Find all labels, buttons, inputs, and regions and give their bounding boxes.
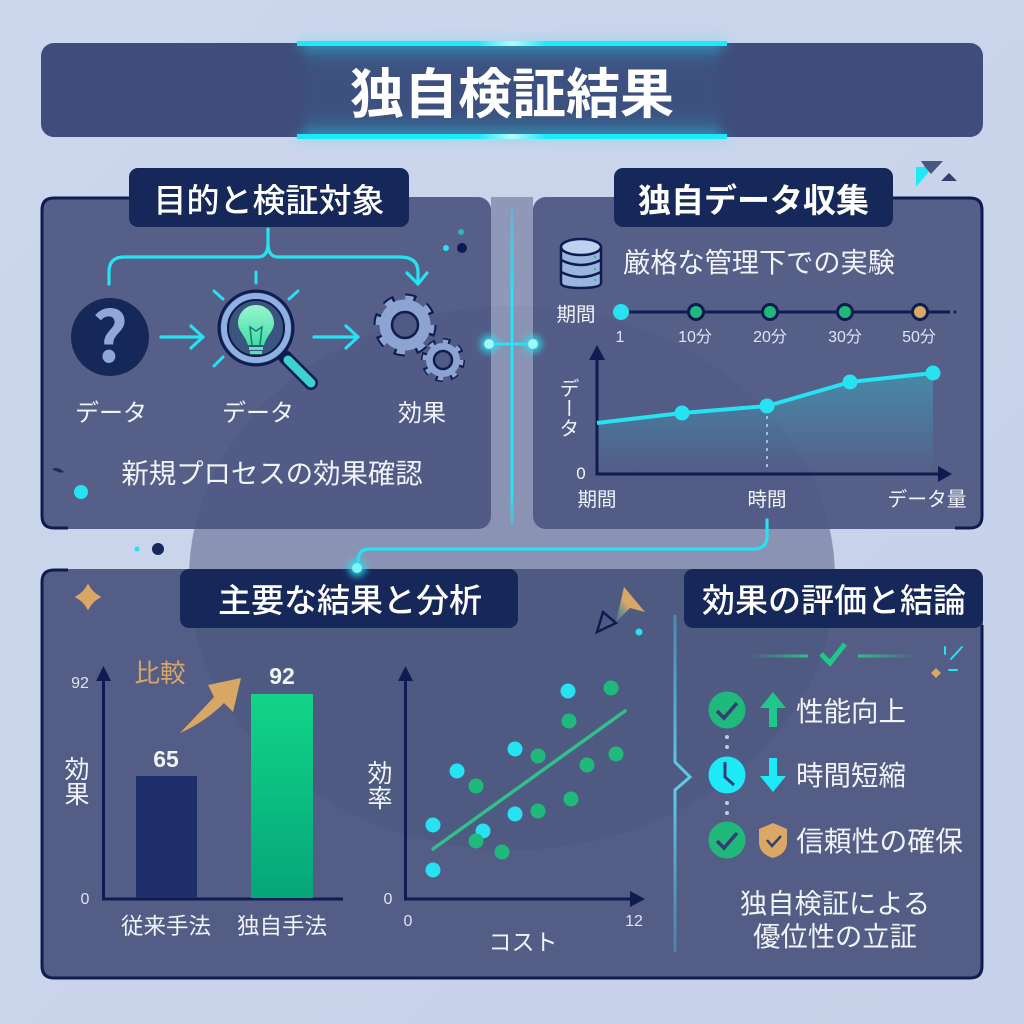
connector dots 2 bbox=[725, 801, 729, 815]
icon: magnifier with bulb bbox=[214, 272, 311, 383]
bracket connector bbox=[109, 229, 427, 284]
label: data 2: データ bbox=[222, 400, 294, 427]
title banner bbox=[41, 38, 983, 142]
arrow 1 bbox=[161, 326, 203, 348]
scatter plot bbox=[364, 666, 645, 955]
subheading: strict conditions: 厳格な管理下での実験 bbox=[623, 247, 895, 278]
line chart: データ bbox=[556, 378, 578, 438]
conclusion text: 優位性の立証 bbox=[753, 921, 917, 952]
scatter plot: 効率 bbox=[364, 760, 392, 810]
timeline bbox=[556, 304, 956, 346]
item: performance bbox=[708, 692, 906, 728]
line chart: データ量 bbox=[887, 489, 967, 511]
scatter plot: 12 bbox=[625, 913, 643, 930]
decoration: paper plane bbox=[597, 587, 645, 636]
connector: to results panel bbox=[349, 520, 767, 576]
heading: data collection bbox=[614, 168, 893, 227]
line chart: 0 bbox=[576, 464, 586, 483]
decoration: gold diamond bbox=[76, 585, 100, 609]
item: performance: 性能向上 bbox=[796, 696, 906, 727]
timeline: 10分 bbox=[678, 328, 712, 346]
item: time bbox=[708, 756, 906, 794]
connector: central line and nodes bbox=[481, 208, 541, 525]
panel: purpose and target bbox=[40, 168, 491, 530]
caption: purpose: 新規プロセスの効果確認 bbox=[121, 458, 423, 489]
check ornament bbox=[750, 644, 918, 663]
decoration: comet bbox=[52, 468, 108, 516]
bar chart: 65 bbox=[153, 746, 179, 772]
bar chart: 0 bbox=[81, 891, 90, 908]
decoration: dots bbox=[443, 229, 467, 253]
decoration: top right arrows bbox=[916, 161, 957, 187]
scatter plot: コスト bbox=[488, 929, 558, 955]
icon: gears bbox=[379, 299, 461, 378]
divider with chevron bbox=[675, 615, 690, 952]
bar chart: 92 bbox=[269, 663, 295, 689]
scatter plot: 0 bbox=[384, 891, 393, 908]
line chart: 期間 bbox=[577, 489, 617, 511]
item: reliability bbox=[708, 822, 963, 858]
arrow 2 bbox=[314, 326, 358, 348]
timeline: 30分 bbox=[828, 328, 862, 346]
timeline: 20分 bbox=[753, 328, 787, 346]
heading: purpose bbox=[129, 168, 409, 227]
heading: evaluation bbox=[684, 569, 983, 628]
timeline: 期間 bbox=[556, 304, 596, 326]
decoration: sparkle bbox=[931, 647, 962, 678]
scatter plot: 0 bbox=[404, 913, 413, 930]
panel: results and evaluation bbox=[40, 568, 984, 980]
icon: database bbox=[561, 239, 601, 288]
background: central blob bbox=[189, 197, 835, 850]
decoration: dots above results panel bbox=[134, 543, 164, 555]
bar chart: 従来手法 bbox=[121, 914, 211, 939]
heading: data collection: 独自データ収集 bbox=[638, 182, 869, 219]
heading: results bbox=[180, 569, 518, 628]
heading: purpose: 目的と検証対象 bbox=[154, 182, 384, 219]
bar chart: 92 bbox=[71, 675, 89, 692]
bar chart: 独自手法 bbox=[237, 914, 327, 939]
label: effect: 効果 bbox=[398, 400, 446, 427]
icon: question mark bbox=[71, 282, 149, 383]
bar chart: 効果 bbox=[61, 756, 90, 806]
label: data 1: データ bbox=[75, 400, 147, 427]
heading: results: 主要な結果と分析 bbox=[218, 582, 482, 619]
icon: question mark: ? bbox=[92, 282, 128, 383]
bar chart: 比較 bbox=[134, 660, 186, 688]
connector dots 1 bbox=[725, 735, 729, 749]
line chart bbox=[556, 345, 967, 511]
line chart: 時間 bbox=[747, 489, 787, 511]
heading: evaluation: 効果の評価と結論 bbox=[702, 582, 966, 619]
conclusion text bbox=[740, 888, 930, 952]
conclusion text: 独自検証による bbox=[740, 888, 930, 919]
timeline: 50分 bbox=[902, 328, 936, 346]
timeline: 1 bbox=[616, 329, 625, 346]
panel: data collection bbox=[533, 168, 984, 530]
title text: 独自検証結果 bbox=[350, 65, 674, 125]
bar chart bbox=[61, 660, 343, 939]
item: reliability: 信頼性の確保 bbox=[796, 826, 963, 857]
item: time: 時間短縮 bbox=[796, 760, 906, 791]
